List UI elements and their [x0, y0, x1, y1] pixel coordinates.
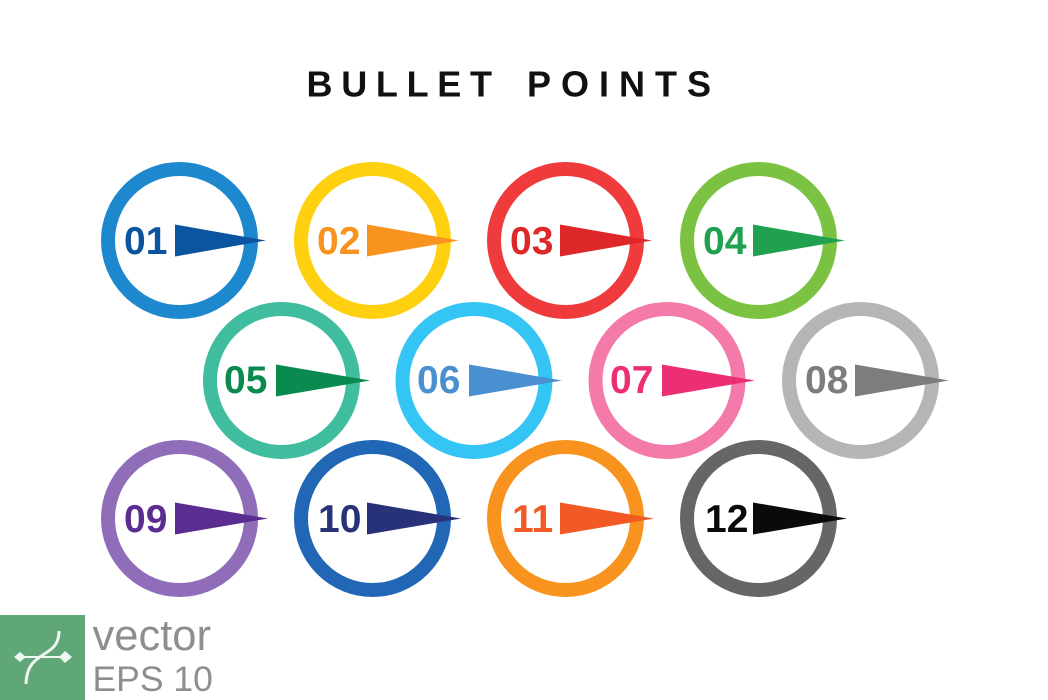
bullet 10: 10: [318, 498, 361, 541]
bullet 08: [789, 309, 949, 452]
bullet 07: [596, 309, 755, 452]
bullet 02: 02: [317, 220, 360, 263]
bullet 11: [494, 447, 654, 590]
icon: vector badge: [0, 615, 85, 700]
bullet 11: 11: [512, 498, 553, 541]
title: POINTS: [527, 64, 721, 104]
bullet 01: [108, 169, 266, 312]
label: vector EPS 10: [92, 612, 213, 699]
bullet 02: [301, 169, 459, 312]
title: [306, 64, 721, 104]
bullet 03: 03: [510, 220, 553, 263]
bullet 03: [494, 169, 652, 312]
label: vector EPS 10: EPS 10: [92, 659, 213, 699]
bullet 01: 01: [124, 220, 167, 263]
bullet 08: 08: [805, 359, 848, 402]
label: vector EPS 10: vector: [92, 612, 211, 660]
bullet 04: [687, 169, 845, 312]
bullet 06: [402, 309, 562, 452]
bullet 05: [210, 309, 370, 452]
bullet 09: 09: [124, 498, 167, 541]
bullet 12: 12: [705, 498, 748, 541]
bullet 07: 07: [610, 359, 653, 402]
title: BULLET: [306, 64, 501, 104]
bullet 09: [108, 447, 268, 590]
bullet 06: 06: [417, 359, 460, 402]
bullet 10: [301, 447, 461, 590]
bullet 12: [687, 447, 847, 590]
bullet 04: 04: [703, 220, 747, 263]
bullet 05: 05: [224, 359, 267, 402]
